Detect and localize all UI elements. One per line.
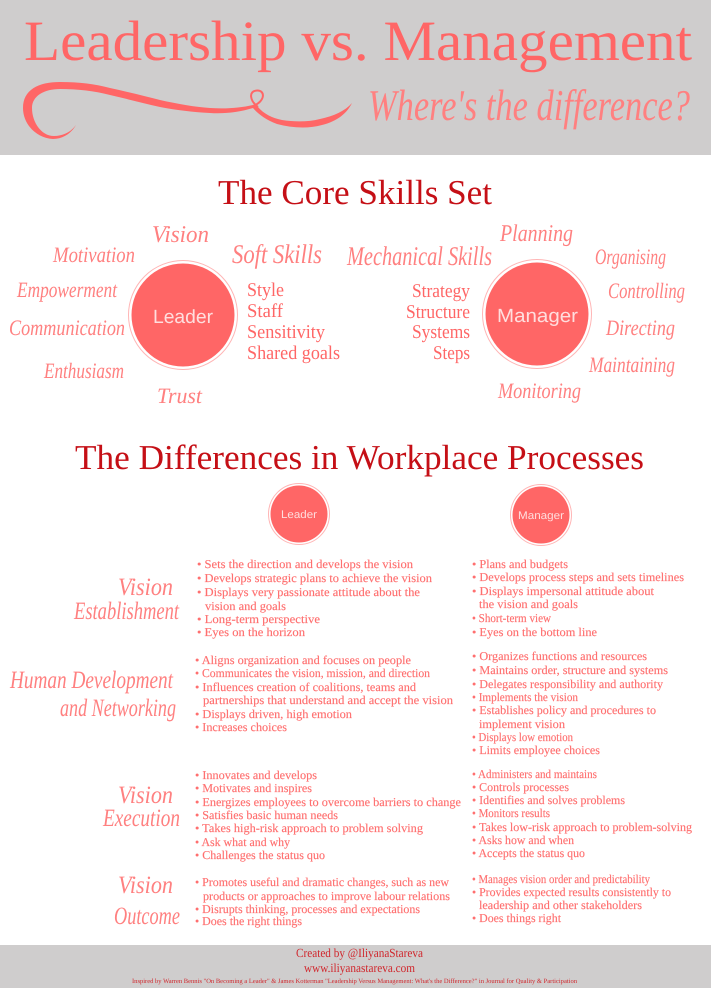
row label: vision establishment: Vision [118, 574, 173, 601]
leader text: vision outcome: • Does the right things [195, 914, 302, 928]
manager text: vision outcome: leadership and other stakeholders [479, 898, 642, 912]
leader text: vision execution: • Motivates and inspires [195, 781, 312, 795]
leader skill words: Enthusiasm [43, 358, 124, 383]
footer website: www.iliyanastareva.com [304, 961, 415, 975]
manager text: vision outcome [472, 872, 671, 925]
manager circle [482, 260, 592, 368]
leader text: vision outcome: • Promotes useful and dramatic changes, such as new [195, 875, 449, 889]
column badge: manager: Manager [518, 510, 564, 522]
manager text: vision establishment: • Short-term view [472, 611, 551, 625]
leader skill words: Communication [9, 315, 125, 340]
column badge: manager [510, 484, 572, 546]
leader text: vision outcome [195, 875, 450, 928]
row label: vision outcome: Vision [118, 872, 173, 899]
leader skill words: Trust [157, 383, 203, 408]
manager text: vision establishment: • Displays impersonal attitude about [472, 584, 655, 598]
leader text: human development: partnerships that understand and accept the vision [203, 693, 453, 707]
soft skills list: Staff [247, 301, 283, 322]
leader text: vision execution: • Challenges the status quo [195, 848, 325, 862]
soft skills heading: Soft Skills [232, 239, 322, 269]
manager text: vision execution: • Administers and maintains [472, 767, 597, 781]
column badge: leader [268, 484, 330, 544]
decorative swoosh [23, 82, 352, 139]
manager text: human development: • Maintains order, structure and systems [472, 663, 668, 677]
row label: vision establishment [73, 574, 180, 625]
manager text: human development: • Displays low emotion [472, 730, 573, 744]
manager circle: Manager [497, 306, 579, 327]
manager skill words: Maintaining [588, 352, 675, 377]
manager text: vision execution [472, 767, 692, 860]
leader text: vision establishment: • Sets the direction and develops the vision [197, 557, 413, 571]
manager text: vision outcome: • Manages vision order and predictability [472, 872, 650, 886]
leader skill words: Vision [152, 222, 209, 248]
leader skills diagram [9, 222, 340, 408]
leader text: vision establishment: • Long-term perspective [197, 612, 320, 626]
footer source note: Inspired by Warren Bennis "On Becoming a Leader" & James Kotterman "Leadership Versus Management: What's the Difference?" in Journal for Quality & Participation [132, 978, 578, 985]
row label: vision execution: Vision [118, 782, 173, 809]
manager text: vision execution: • Controls processes [472, 780, 569, 794]
leader text: human development: • Influences creation of coalitions, teams and [195, 680, 416, 694]
footer banner [0, 945, 711, 988]
mechanical skills list: Systems [412, 322, 470, 343]
manager text: vision establishment: • Plans and budgets [472, 557, 568, 571]
row label: vision execution: Execution [102, 805, 180, 832]
leader circle: Leader [153, 307, 214, 328]
manager text: human development: • Implements the vision [472, 690, 578, 704]
manager text: vision execution: • Asks how and when [472, 833, 574, 847]
leader skill words: Empowerment [16, 277, 118, 302]
soft skills list: Sensitivity [247, 322, 325, 343]
row label: vision establishment: Establishment [73, 598, 180, 625]
row label: vision outcome: Outcome [114, 903, 180, 930]
manager text: human development: implement vision [479, 717, 565, 731]
row label: human development and networking [9, 667, 176, 722]
manager skill words: Planning [499, 221, 573, 247]
manager text: vision execution: • Takes low-risk approach to problem-solving [472, 820, 692, 834]
leader text: human development: • Communicates the vision, mission, and direction [195, 666, 430, 680]
leader text: vision establishment: vision and goals [205, 599, 286, 613]
manager text: human development [472, 649, 668, 757]
leader text: vision establishment: • Develops strategic plans to achieve the vision [197, 571, 432, 585]
leader text: vision outcome: products or approaches to improve labour relations [203, 889, 450, 903]
manager skill words [497, 221, 685, 403]
manager text: human development: • Organizes functions and resources [472, 649, 647, 663]
leader text: vision execution: • Energizes employees to overcome barriers to change [195, 795, 461, 809]
leader text: human development: • Increases choices [195, 720, 287, 734]
row label: vision outcome [114, 872, 180, 930]
soft skills list [247, 280, 340, 364]
leader skill words [9, 222, 209, 408]
leader skill words: Motivation [52, 242, 135, 267]
manager text: vision execution: • Monitors results [472, 806, 550, 820]
leader text: vision execution: • Takes high-risk approach to problem solving [195, 821, 423, 835]
soft skills list: Style [247, 280, 284, 301]
soft skills list: Shared goals [247, 343, 340, 364]
leader text: vision establishment: • Eyes on the horizon [197, 625, 305, 639]
leader circle [128, 260, 238, 370]
manager text: vision establishment: • Eyes on the bottom line [472, 625, 597, 639]
manager text: human development: • Establishes policy and procedures to [472, 703, 656, 717]
header banner [0, 0, 711, 155]
heading: core skills: The Core Skills Set [218, 173, 492, 212]
manager text: vision outcome: • Provides expected results consistently to [472, 885, 671, 899]
row label: human development and networking: Human Development [9, 667, 174, 694]
footer credit: Created by @IliyanaStareva [296, 946, 423, 960]
heading: workplace processes: The Differences in Workplace Processes [75, 438, 644, 477]
manager skills diagram [346, 221, 685, 403]
mechanical skills list [406, 281, 470, 364]
manager text: human development: • Delegates responsibility and authority [472, 677, 663, 691]
manager text: vision outcome: • Does things right [472, 911, 562, 925]
manager skill words: Directing [605, 315, 675, 340]
manager skill words: Controlling [608, 278, 685, 303]
leader text: vision establishment: • Displays very passionate attitude about the [197, 585, 420, 599]
row label: human development and networking: and Networking [60, 695, 176, 722]
title: Leadership vs. Management [24, 10, 692, 73]
leader text: vision outcome: • Disrupts thinking, processes and expectations [195, 902, 420, 916]
leader text: human development [195, 653, 453, 734]
manager text: vision execution: • Accepts the status quo [472, 846, 585, 860]
manager text: human development: • Limits employee choices [472, 743, 600, 757]
manager text: vision establishment [472, 557, 684, 639]
manager skill words: Organising [595, 244, 666, 269]
column badge: leader: Leader [281, 509, 317, 521]
leader text: vision execution: • Innovates and develops [195, 768, 317, 782]
manager text: vision execution: • Identifies and solves problems [472, 793, 625, 807]
leader text: human development: • Aligns organization and focuses on people [195, 653, 411, 667]
leader text: vision execution: • Ask what and why [195, 835, 290, 849]
leader text: vision establishment [197, 557, 432, 639]
mechanical skills list: Strategy [412, 281, 470, 302]
row label: vision execution [102, 782, 180, 832]
manager skill words: Monitoring [497, 378, 581, 403]
leader text: human development: • Displays driven, high emotion [195, 707, 352, 721]
mechanical skills list: Structure [406, 302, 470, 323]
leader text: vision execution: • Satisfies basic human needs [195, 808, 338, 822]
manager text: vision establishment: • Develops process steps and sets timelines [472, 570, 684, 584]
mechanical skills list: Steps [433, 343, 470, 364]
manager text: vision establishment: the vision and goals [479, 597, 578, 611]
leader text: vision execution [195, 768, 461, 862]
mechanical skills heading: Mechanical Skills [346, 241, 492, 271]
